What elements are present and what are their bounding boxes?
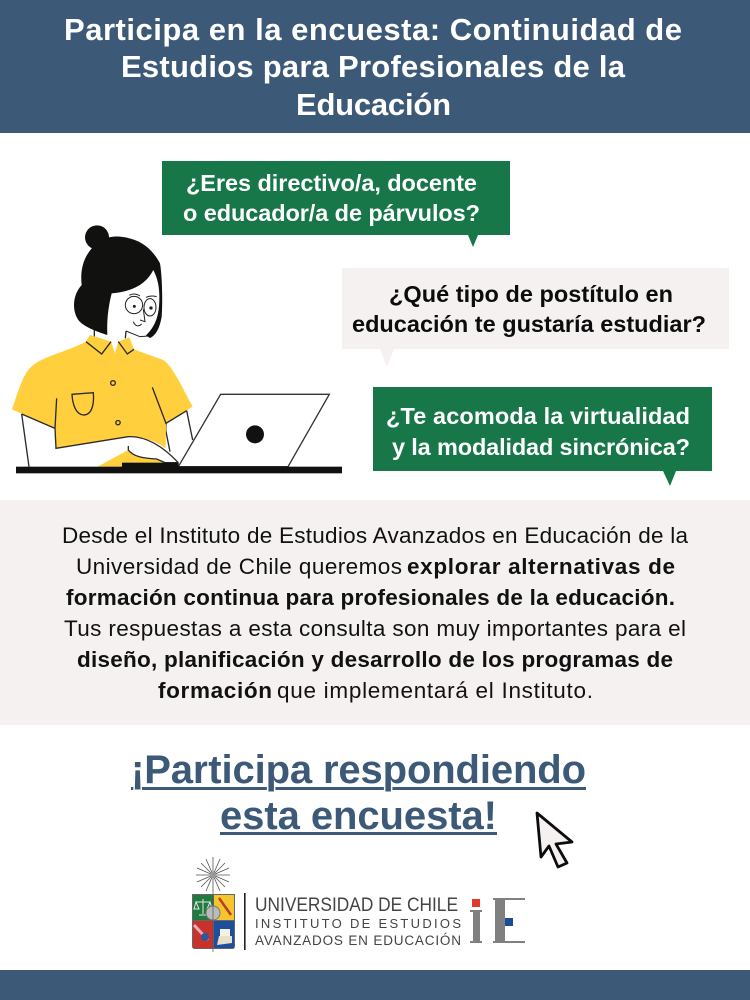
description panel: formación	[158, 678, 272, 703]
hair bun	[85, 225, 109, 249]
header band with title: Estudios para Profesionales de la	[121, 49, 626, 84]
call to action link: esta encuesta!	[220, 794, 497, 838]
header band with title: Participa en la encuesta: Continuidad de	[64, 12, 682, 47]
speech bubble: virtualidad	[373, 387, 712, 486]
icon: crest star	[196, 857, 230, 893]
description panel: Tus respuestas a esta consulta son muy importantes para el	[64, 616, 686, 641]
icon: mouse cursor	[537, 813, 572, 867]
shirt	[12, 335, 193, 448]
laptop	[178, 394, 329, 467]
wordmark: UNIVERSIDAD DE CHILE	[255, 895, 458, 916]
description panel: Desde el Instituto de Estudios Avanzados en Educación de la	[62, 523, 688, 548]
arm outlines	[22, 330, 193, 467]
header band with title: Educación	[296, 87, 451, 122]
speech bubble: directivo	[162, 161, 510, 247]
divider	[244, 893, 246, 950]
description panel	[0, 500, 750, 725]
header band with title	[0, 0, 750, 133]
description panel: que implementará el Instituto.	[277, 678, 593, 703]
speech bubble: directivo: ¿Eres directivo/a, docente	[186, 170, 477, 196]
IE logo	[470, 898, 525, 943]
logo: university crest and wordmark	[192, 857, 525, 952]
speech bubble: virtualidad: y la modalidad sincrónica?	[392, 434, 690, 460]
shirt details	[22, 342, 187, 463]
speech bubble: postítulo: educación te gustaría estudiar?	[352, 311, 706, 337]
speech bubble: virtualidad: ¿Te acomoda la virtualidad	[386, 403, 690, 429]
hair	[74, 237, 162, 338]
shirt lower triangle	[98, 450, 163, 467]
call to action link	[131, 748, 586, 838]
logo: university crest and wordmark: AVANZADOS EN EDUCACIÓN	[255, 933, 461, 948]
glasses and facial features	[125, 294, 157, 337]
speech bubble: postítulo: ¿Qué tipo de postítulo en	[389, 281, 673, 307]
description panel: formación continua para profesionales de la educación.	[66, 585, 675, 610]
speech bubble: postítulo	[342, 268, 729, 367]
description panel: diseño, planificación y desarrollo de los programas de	[77, 647, 673, 672]
speech bubble: directivo: o educador/a de párvulos?	[183, 200, 480, 226]
illustration: woman at laptop	[12, 225, 342, 473]
logo: university crest and wordmark: INSTITUTO DE ESTUDIOS	[255, 916, 461, 931]
description panel: Universidad de Chile queremos	[76, 554, 402, 579]
desk	[16, 463, 342, 473]
icon: crest shield	[192, 893, 235, 952]
description panel: explorar alternativas de	[407, 554, 675, 579]
call to action link: ¡Participa respondiendo	[131, 748, 586, 792]
footer band	[0, 970, 750, 1000]
